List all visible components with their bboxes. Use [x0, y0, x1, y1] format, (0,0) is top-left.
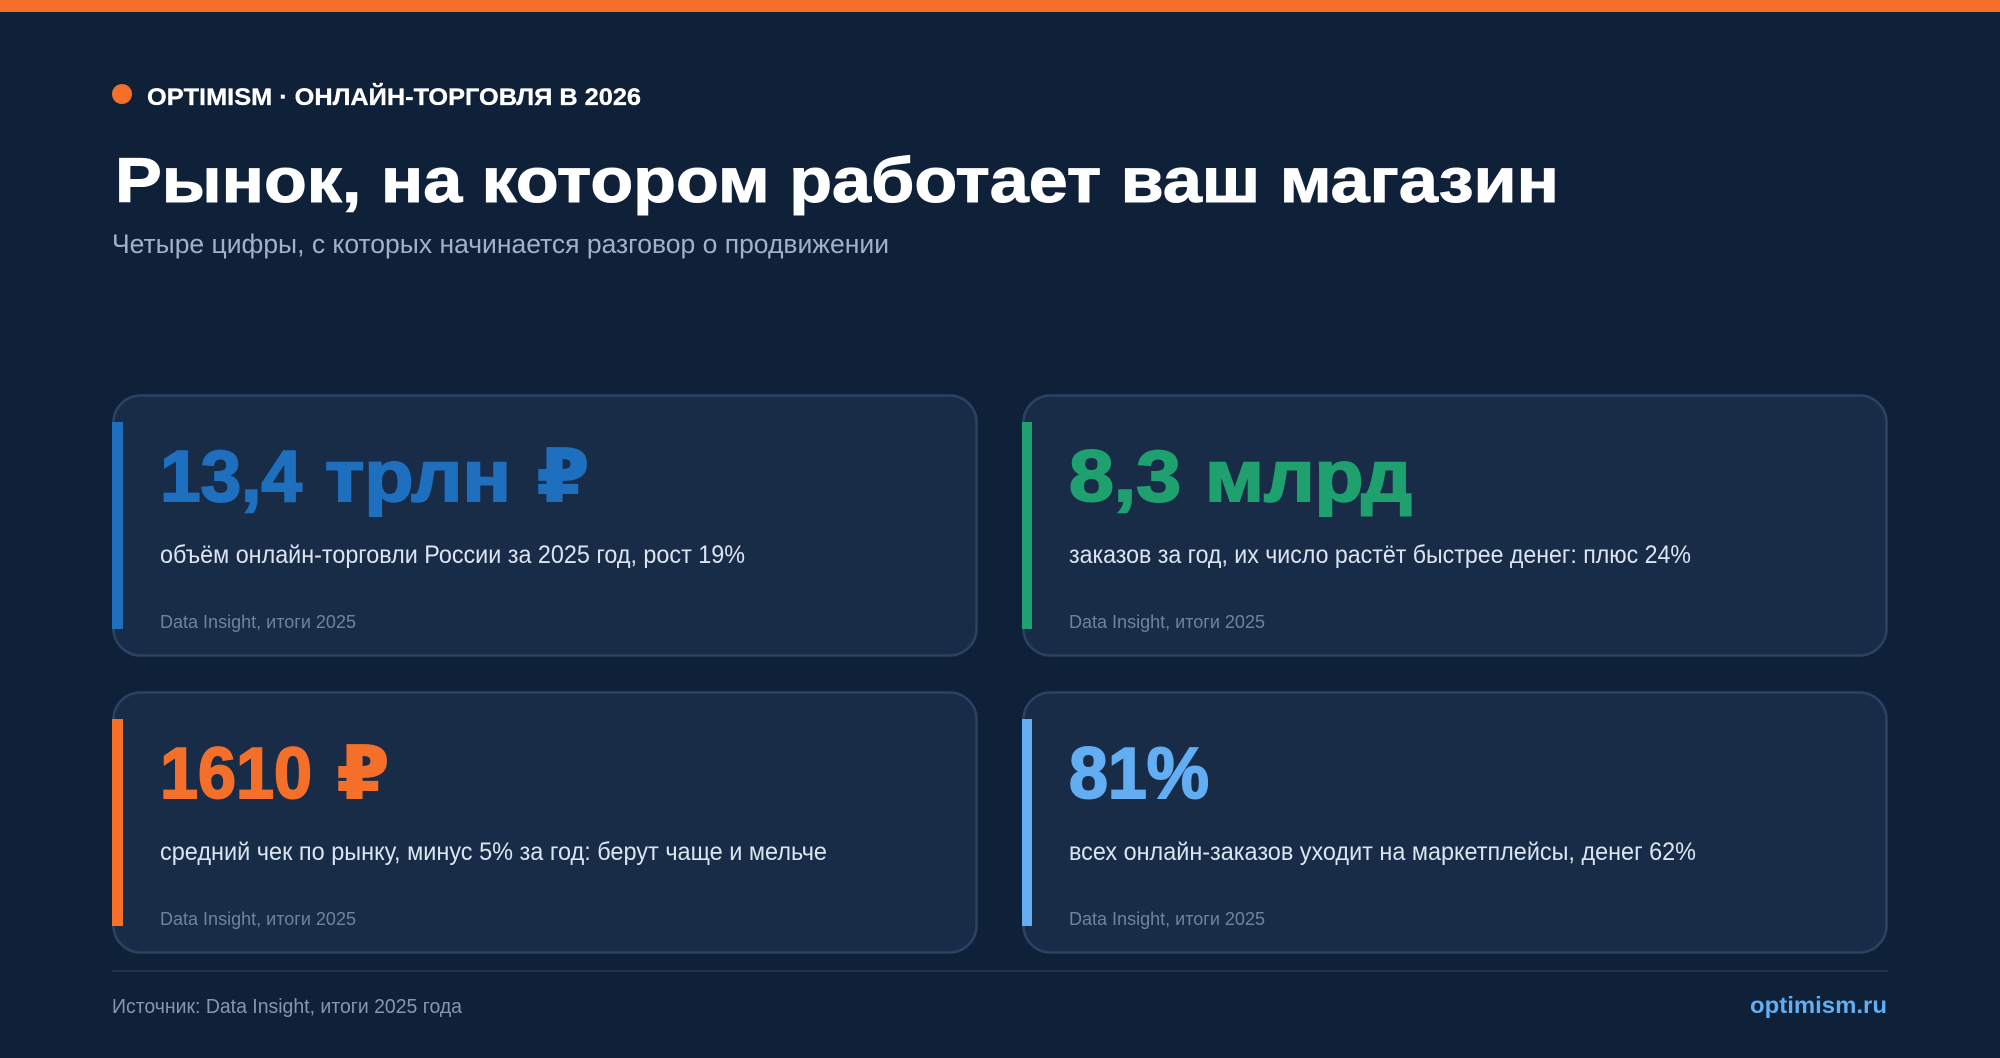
panel: online trade volume [112, 396, 976, 656]
big number: ₽ [337, 734, 389, 814]
source: Data Insight, итоги 2025 [1069, 909, 1265, 929]
description: всех онлайн-заказов уходит на маркетплейсы, денег 62% [1069, 838, 1696, 866]
big number [160, 437, 589, 517]
icon: orange dot [112, 84, 132, 104]
big number: 8,3 [1069, 437, 1181, 517]
big number: 81% [1069, 734, 1209, 814]
accent bar: light blue [1022, 719, 1032, 926]
title: Рынок, на котором работает ваш магазин [115, 146, 1559, 216]
big number: ₽ [537, 437, 589, 517]
top accent bar [0, 0, 2000, 12]
big number: трлн [325, 437, 511, 517]
accent bar: orange [112, 719, 123, 926]
big number [160, 734, 389, 814]
big number: 1610 [160, 734, 312, 814]
footer source: Источник: Data Insight, итоги 2025 года [112, 996, 463, 1018]
description: объём онлайн-торговли России за 2025 год, рост 19% [160, 541, 745, 569]
accent bar: green [1022, 422, 1032, 629]
panel: average check [112, 692, 976, 952]
footer site link: optimism.ru [1750, 992, 1887, 1018]
eyebrow text: OPTIMISM · ОНЛАЙН-ТОРГОВЛЯ В 2026 [147, 83, 641, 111]
big number: 13,4 [160, 437, 302, 517]
eyebrow [112, 83, 641, 111]
panel: marketplaces share [1022, 692, 1886, 952]
subtitle: Четыре цифры, с которых начинается разговор о продвижении [112, 229, 889, 259]
accent bar: blue [112, 422, 123, 629]
big number: млрд [1205, 437, 1412, 517]
description: заказов за год, их число растёт быстрее денег: плюс 24% [1069, 541, 1691, 569]
source: Data Insight, итоги 2025 [160, 612, 356, 632]
description: средний чек по рынку, минус 5% за год: берут чаще и мельче [160, 838, 827, 866]
big number [1069, 437, 1412, 517]
source: Data Insight, итоги 2025 [160, 909, 356, 929]
source: Data Insight, итоги 2025 [1069, 612, 1265, 632]
panel: orders [1022, 396, 1886, 656]
